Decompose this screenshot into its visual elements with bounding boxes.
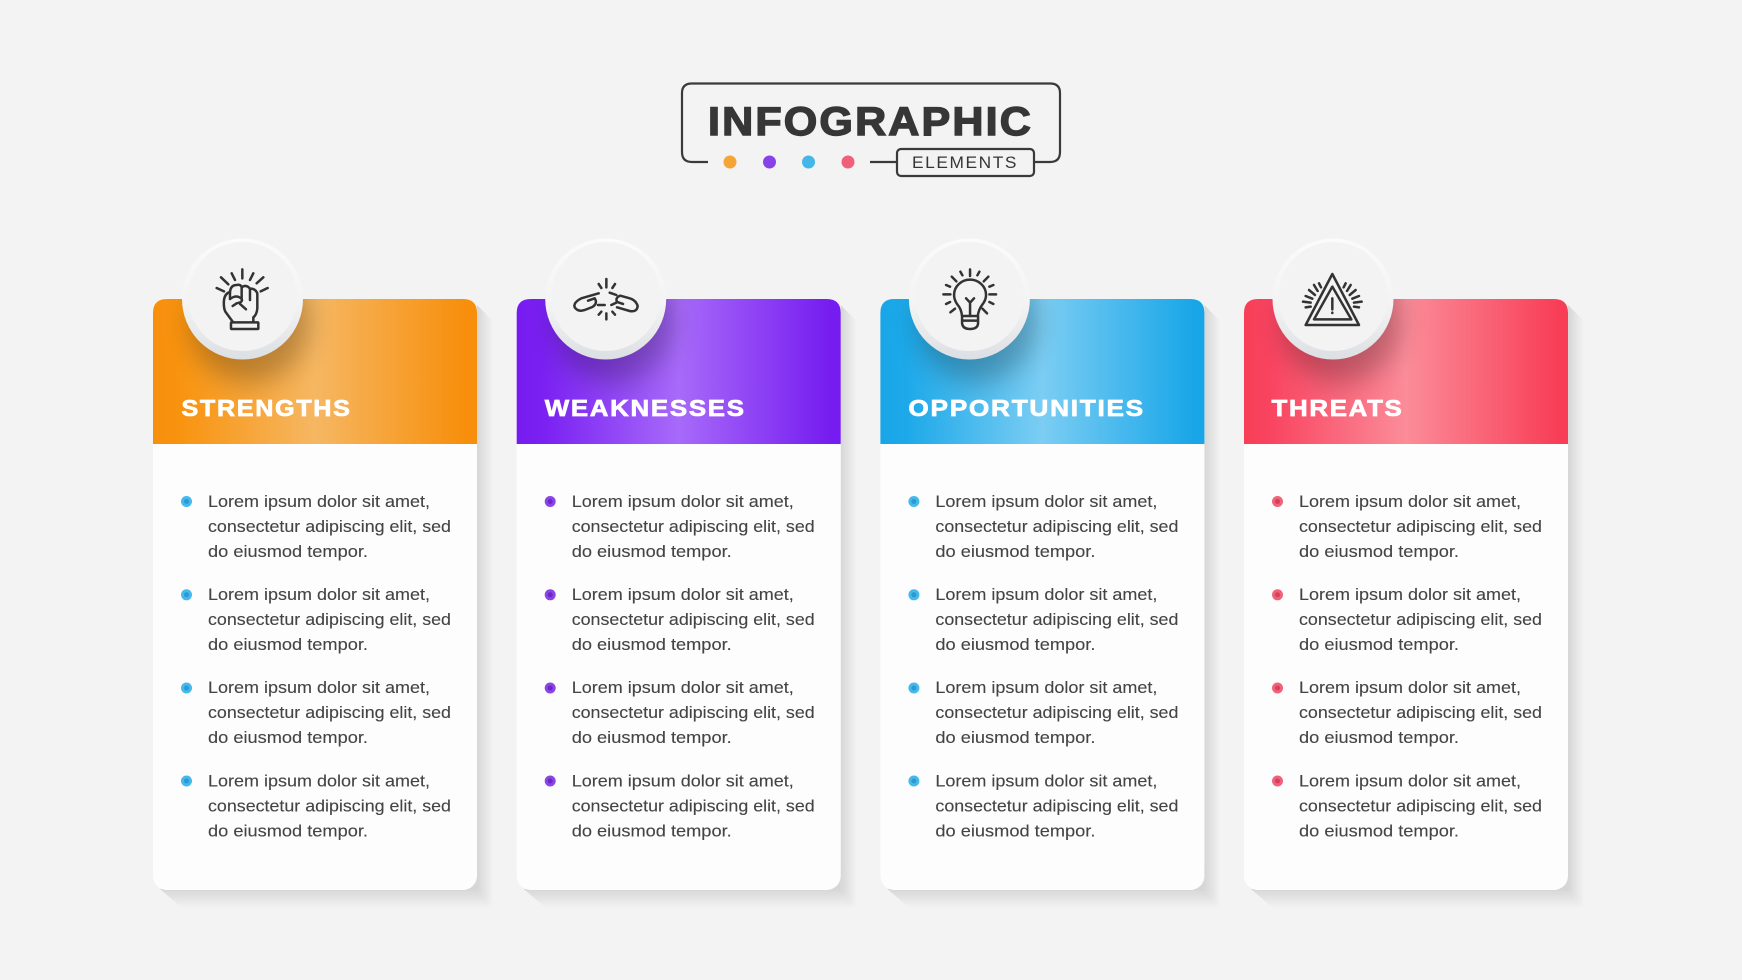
panel: strengths: [153, 238, 493, 908]
subtitle: ELEMENTS: ELEMENTS: [912, 154, 1018, 172]
bullet list: opportunities: consectetur adipiscing elit, sed: [935, 703, 1178, 722]
bullet list: threats: consectetur adipiscing elit, sed: [1299, 796, 1542, 816]
bullet list: opportunities: do eiusmod tempor.: [935, 635, 1095, 654]
bullet list: weaknesses: do eiusmod tempor.: [572, 635, 732, 654]
bullet list: threats: [1272, 492, 1542, 840]
bullet list: opportunities: do eiusmod tempor.: [935, 728, 1095, 747]
bullet list: opportunities: Lorem ipsum dolor sit amet,: [935, 585, 1157, 604]
bullet list: threats: do eiusmod tempor.: [1299, 542, 1459, 561]
bullet list: weaknesses: [545, 492, 815, 840]
bullet list: strengths: Lorem ipsum dolor sit amet,: [208, 585, 430, 604]
bullet list: opportunities: Lorem ipsum dolor sit amet,: [935, 772, 1157, 790]
bullet list: opportunities: consectetur adipiscing elit, sed: [935, 517, 1178, 536]
bullet list: threats: Lorem ipsum dolor sit amet,: [1299, 492, 1521, 511]
panel: weaknesses: [517, 238, 857, 908]
bullet list: weaknesses: Lorem ipsum dolor sit amet,: [572, 678, 794, 697]
bullet list: opportunities: Lorem ipsum dolor sit amet,: [935, 678, 1157, 697]
bullet list: strengths: do eiusmod tempor.: [208, 728, 368, 747]
bullet list: strengths: Lorem ipsum dolor sit amet,: [208, 772, 430, 790]
header: weaknesses: [517, 299, 841, 444]
bullet list: weaknesses: consectetur adipiscing elit, sed: [572, 610, 815, 629]
heading: OPPORTUNITIES: OPPORTUNITIES: [908, 395, 1145, 421]
bullet list: weaknesses: do eiusmod tempor.: [572, 728, 732, 747]
bullet list: strengths: do eiusmod tempor.: [208, 822, 368, 840]
bullet list: weaknesses: consectetur adipiscing elit, sed: [572, 703, 815, 722]
icon: light bulb: [909, 238, 1030, 360]
bullet list: weaknesses: Lorem ipsum dolor sit amet,: [572, 772, 794, 790]
bullet list: threats: Lorem ipsum dolor sit amet,: [1299, 678, 1521, 697]
bullet list: threats: consectetur adipiscing elit, sed: [1299, 517, 1542, 536]
title dots: [724, 156, 854, 168]
header: strengths: [153, 299, 477, 444]
bullet list: weaknesses: consectetur adipiscing elit, sed: [572, 796, 815, 816]
heading: THREATS: THREATS: [1272, 395, 1404, 421]
bullet list: opportunities: consectetur adipiscing elit, sed: [935, 796, 1178, 816]
bullet list: opportunities: consectetur adipiscing elit, sed: [935, 610, 1178, 629]
title frame: [682, 84, 1060, 162]
icon: fist: [182, 238, 303, 360]
header: opportunities: [880, 299, 1204, 444]
heading: STRENGTHS: STRENGTHS: [182, 395, 352, 421]
bullet list: strengths: Lorem ipsum dolor sit amet,: [208, 492, 430, 511]
bullet list: strengths: do eiusmod tempor.: [208, 635, 368, 654]
heading: WEAKNESSES: WEAKNESSES: [545, 395, 746, 421]
bullet list: opportunities: do eiusmod tempor.: [935, 822, 1095, 840]
icon: warning triangle: [1272, 238, 1394, 360]
bullet list: threats: Lorem ipsum dolor sit amet,: [1299, 585, 1521, 604]
bullet list: threats: Lorem ipsum dolor sit amet,: [1299, 772, 1521, 790]
bullet list: threats: do eiusmod tempor.: [1299, 822, 1459, 840]
bullet list: threats: consectetur adipiscing elit, sed: [1299, 703, 1542, 722]
bullet list: strengths: consectetur adipiscing elit, sed: [208, 796, 451, 816]
bullet list: weaknesses: Lorem ipsum dolor sit amet,: [572, 492, 794, 511]
bullet list: weaknesses: do eiusmod tempor.: [572, 822, 732, 840]
title: INFOGRAPHIC: INFOGRAPHIC: [708, 100, 1033, 144]
bullet list: strengths: Lorem ipsum dolor sit amet,: [208, 678, 430, 697]
subtitle: ELEMENTS: [897, 149, 1034, 176]
bullet list: opportunities: Lorem ipsum dolor sit amet,: [935, 492, 1157, 511]
bullet list: strengths: do eiusmod tempor.: [208, 542, 368, 561]
bullet list: weaknesses: Lorem ipsum dolor sit amet,: [572, 585, 794, 604]
bullet list: opportunities: do eiusmod tempor.: [935, 542, 1095, 561]
bullet list: threats: do eiusmod tempor.: [1299, 635, 1459, 654]
bullet list: threats: consectetur adipiscing elit, sed: [1299, 610, 1542, 629]
panel: opportunities: [880, 238, 1220, 908]
bullet list: threats: do eiusmod tempor.: [1299, 728, 1459, 747]
bullet list: opportunities: [908, 492, 1178, 840]
title block: [682, 84, 1060, 176]
bullet list: strengths: consectetur adipiscing elit, sed: [208, 517, 451, 536]
icon: broken chain: [545, 238, 666, 360]
bullet list: weaknesses: consectetur adipiscing elit, sed: [572, 517, 815, 536]
header: threats: [1244, 299, 1568, 444]
bullet list: strengths: consectetur adipiscing elit, sed: [208, 610, 451, 629]
bullet list: strengths: [181, 492, 451, 840]
panel: threats: [1244, 238, 1584, 908]
bullet list: weaknesses: do eiusmod tempor.: [572, 542, 732, 561]
bullet list: strengths: consectetur adipiscing elit, sed: [208, 703, 451, 722]
